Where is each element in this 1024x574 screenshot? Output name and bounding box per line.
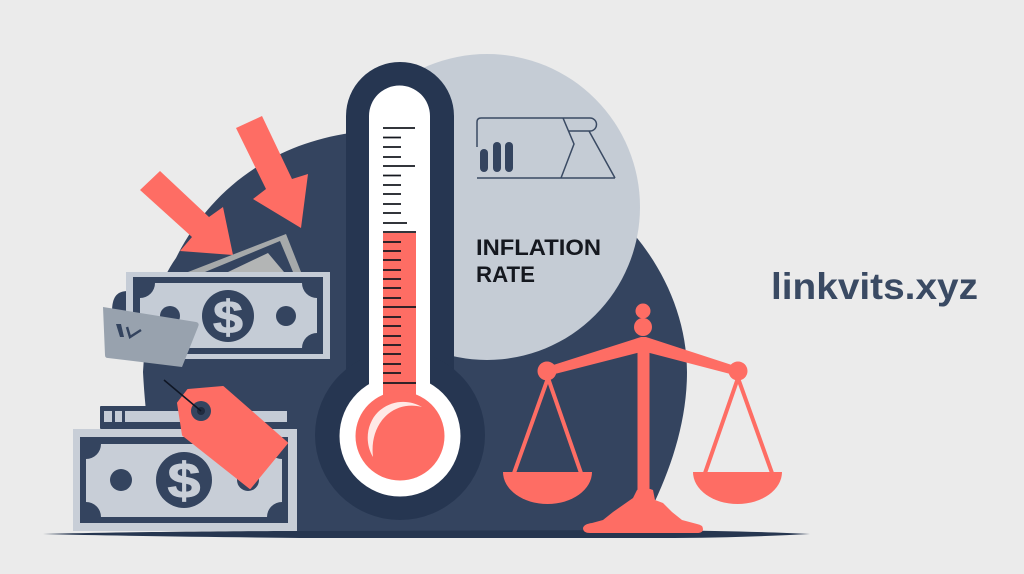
upper dollar bill (126, 272, 330, 359)
dark background blob (143, 133, 687, 531)
lower dollar bill: $ (168, 453, 201, 509)
upper dollar bill: $ (213, 291, 243, 343)
stack strip behind lower bill (100, 406, 290, 429)
thermometer scale ticks (383, 128, 416, 383)
lower dollar bill (73, 429, 297, 531)
arrow: right red arrow (236, 116, 308, 228)
small dark tab behind note (112, 291, 128, 312)
grey folded note (103, 307, 199, 367)
thermometer (315, 62, 485, 520)
light grey circle (424, 54, 640, 360)
balance scale (503, 304, 782, 533)
brand text: linkvits.xyz (771, 266, 978, 307)
inflation rate label: RATE (476, 262, 535, 287)
icon: bar chart and funnel outline (477, 118, 615, 178)
banknote behind upper bill (188, 234, 301, 272)
inflation rate label (476, 235, 601, 287)
ground line (43, 530, 810, 538)
thermometer white tube (340, 85, 460, 496)
arrow: left red arrow (140, 171, 233, 255)
bulb highlight (368, 402, 422, 457)
price tag (164, 380, 287, 488)
inflation rate label: INFLATION (476, 235, 601, 260)
thermometer mercury (356, 233, 444, 480)
thermometer outer casing (315, 62, 485, 520)
